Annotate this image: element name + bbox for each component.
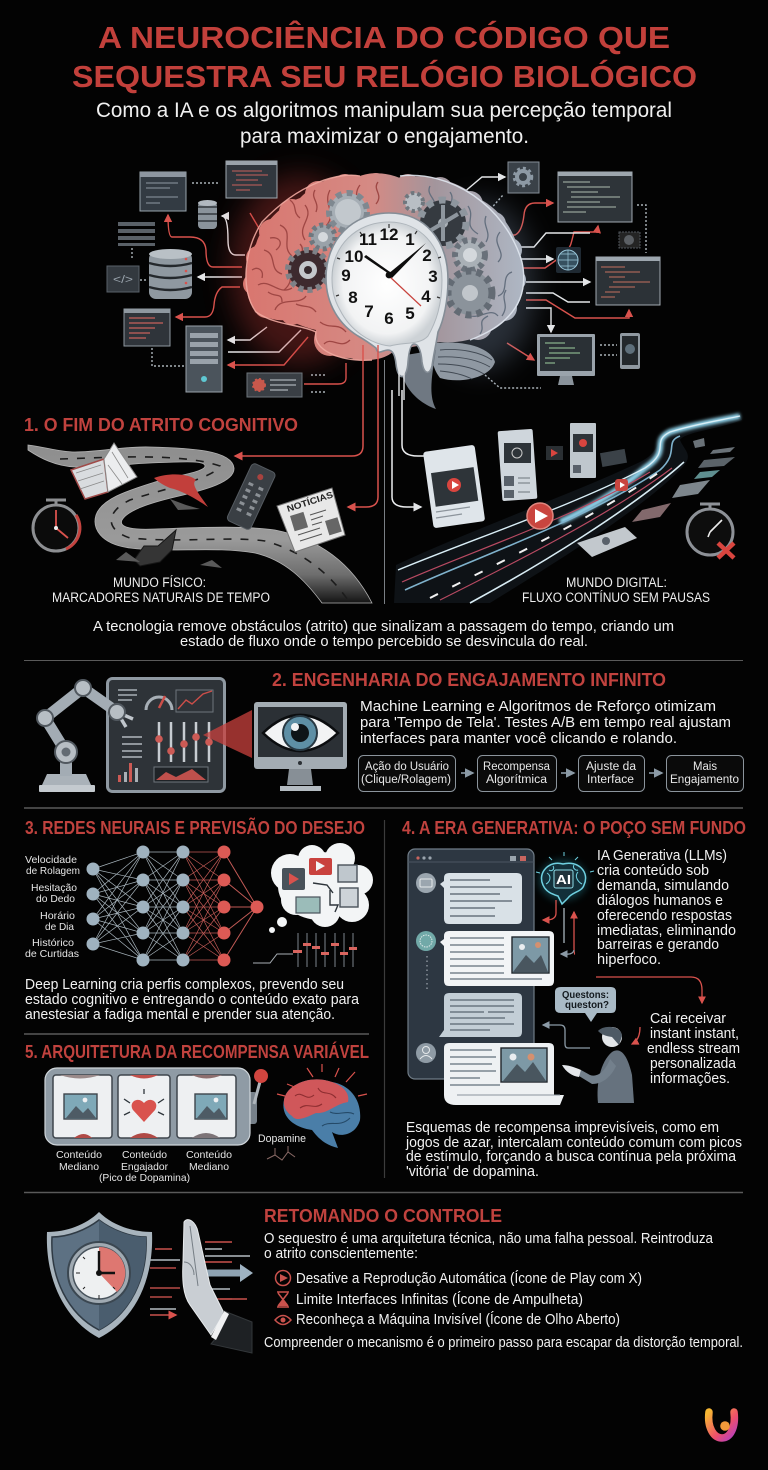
winding road: physical world	[28, 443, 372, 603]
stop hand	[183, 1220, 252, 1353]
section: taking back control	[47, 1206, 743, 1353]
tip: limit infinite interfaces: Limite Interfaces Infinitas (Ícone de Ampulheta)	[296, 1291, 583, 1308]
highway: digital world	[394, 414, 742, 603]
body text: estado de fluxo onde o tempo percebido se desvincula do real.	[180, 633, 588, 650]
remote control	[226, 463, 276, 531]
flow: engagement loop	[358, 756, 744, 792]
dark small card	[619, 232, 640, 248]
AI brain icon: AI	[556, 872, 571, 887]
clock numbers: 4	[421, 287, 431, 306]
captions	[52, 575, 710, 605]
vertical stem lines	[363, 345, 404, 400]
reel captions: (Pico de Dopamina)	[99, 1172, 190, 1184]
gears	[288, 193, 492, 315]
body text: variable reward: 'vitória' de dopamina.	[406, 1163, 539, 1180]
body text: stream: endless stream	[647, 1040, 740, 1057]
heading: 3. REDES NEURAIS E PREVISÃO DO DESEJO	[25, 817, 365, 838]
newspaper: NOTÍCIAS	[286, 490, 334, 514]
message bubble 1	[440, 873, 522, 924]
step: adjustment: Interface	[587, 774, 634, 786]
subtitle	[96, 99, 672, 148]
melting clock	[326, 213, 448, 377]
body text: generative AI	[597, 847, 736, 968]
subtitle: para maximizar o engajamento.	[240, 125, 529, 148]
clock numbers	[341, 225, 438, 328]
neural network diagram	[86, 846, 264, 966]
input labels	[25, 854, 80, 960]
body text: generative AI: IA Generativa (LLMs)	[597, 847, 727, 864]
chat window	[408, 849, 564, 1105]
intro text: o atrito conscientemente:	[264, 1245, 418, 1262]
shield	[47, 1212, 152, 1338]
input labels: do Dedo	[36, 893, 75, 905]
step: more engagement: Engajamento	[670, 774, 739, 786]
step: user action: Ação do Usuário	[365, 761, 449, 773]
slot machine	[45, 1068, 268, 1145]
title	[72, 19, 697, 94]
reel captions: Conteúdo	[122, 1149, 167, 1161]
arrow	[561, 772, 574, 774]
data icons, left	[107, 161, 302, 397]
book	[71, 443, 137, 499]
person	[562, 1027, 634, 1103]
gear card	[247, 373, 302, 397]
control panel	[108, 678, 224, 792]
brain folds	[252, 182, 379, 344]
section 2: infinite engagement engineering	[37, 670, 744, 792]
step: more engagement: Mais	[693, 761, 717, 773]
body text: generative AI: hiperfoco.	[597, 951, 661, 968]
body text	[93, 618, 674, 650]
clock numbers: 7	[364, 302, 374, 321]
monitor	[537, 334, 595, 385]
arrow	[649, 772, 662, 774]
window: code	[596, 257, 660, 305]
robot arm	[37, 680, 133, 792]
avatars	[416, 873, 436, 1063]
clock numbers: 11	[359, 230, 377, 249]
reel captions: Mediano	[59, 1161, 99, 1173]
clock ticks	[336, 224, 441, 298]
captions: MUNDO DIGITAL:	[566, 575, 667, 590]
window: top left	[140, 172, 186, 211]
section 3: neural networks	[25, 817, 373, 1023]
stopwatch	[33, 500, 80, 551]
step: more engagement	[666, 756, 744, 792]
speech bubble: queston?	[565, 1000, 609, 1011]
server tower	[186, 326, 222, 392]
dopamine label: Dopamine	[258, 1133, 306, 1145]
body text	[360, 698, 731, 747]
dopamine rays	[277, 1064, 367, 1096]
section 1: the end of cognitive friction	[24, 360, 742, 650]
intro text: O sequestro é uma arquitetura técnica, não uma falha pessoal. Reintroduza	[264, 1230, 714, 1247]
small brain	[277, 1064, 367, 1148]
code icon: </>	[113, 274, 133, 286]
clock numbers: 6	[384, 309, 394, 328]
arrow	[461, 772, 473, 774]
body text: stream: instant instant,	[650, 1025, 739, 1042]
clock hands	[364, 243, 426, 306]
input labels: Hesitação	[31, 882, 77, 894]
body text	[25, 976, 360, 1023]
cerebellum and brain stem	[433, 342, 495, 380]
newspaper	[277, 488, 345, 552]
message bubble 2	[440, 931, 554, 986]
body text: variable reward: Esquemas de recompensa imprevisíveis, como em	[406, 1119, 719, 1136]
step: user action	[358, 756, 456, 792]
reel captions: Conteúdo	[56, 1149, 102, 1161]
step: user action: (Clique/Rolagem)	[361, 774, 451, 786]
big database	[149, 249, 192, 299]
captions: MUNDO FÍSICO:	[113, 575, 206, 590]
input labels: de Curtidas	[25, 948, 79, 960]
captions: FLUXO CONTÍNUO SEM PAUSAS	[522, 590, 710, 605]
heading: 1. O FIM DO ATRITO COGNITIVO	[24, 415, 298, 435]
step: adjustment	[578, 756, 644, 792]
cloud icons	[282, 868, 305, 890]
hero illustration: brain with melting clock	[107, 161, 660, 409]
tip: disable autoplay: Desative a Reprodução Automática (Ícone de Play com X)	[296, 1270, 642, 1287]
phone	[620, 333, 640, 369]
floating thumbnails	[577, 438, 735, 557]
rubble	[134, 530, 176, 566]
body text: para 'Tempo de Tela'. Testes A/B em tempo real ajustam	[360, 714, 731, 731]
clock numbers: 8	[348, 288, 358, 307]
step: reward: Algorítmica	[486, 774, 548, 786]
tip: recognize the invisible machine: Reconheça a Máquina Invisível (Ícone de Olho Aberto)	[296, 1311, 620, 1328]
captions: MARCADORES NATURAIS DE TEMPO	[52, 590, 270, 605]
reel captions: Conteúdo	[186, 1149, 232, 1161]
body text: interfaces para manter você clicando e rolando.	[360, 730, 677, 747]
list rows	[118, 222, 155, 246]
step: adjustment: Ajuste da	[586, 761, 637, 773]
AI brain icon	[536, 852, 594, 904]
speed lines and arrows	[150, 1242, 253, 1315]
body text: variable reward: jogos de azar, intercalam conteúdo comum com picos	[405, 1134, 742, 1151]
clock numbers: 12	[380, 225, 398, 244]
window: red code	[124, 309, 170, 346]
body text: generative AI: imediatas, eliminando	[597, 922, 736, 939]
body text: stream: Cai receivar	[650, 1010, 726, 1027]
body text: generative AI: oferecendo respostas	[597, 907, 732, 924]
body text: generative AI: barreiras e gerando	[597, 936, 719, 953]
title: SEQUESTRA SEU RELÓGIO BIOLÓGICO	[72, 58, 697, 94]
body text: Machine Learning e Algoritmos de Reforço otimizam	[360, 698, 716, 715]
body text: variable reward	[405, 1119, 742, 1180]
output sliders	[253, 933, 357, 967]
body text: stream: informações.	[650, 1070, 730, 1087]
reel images	[60, 1075, 227, 1138]
body text: Deep Learning cria perfis complexos, prevendo seu	[25, 976, 344, 993]
thought cloud	[269, 843, 373, 933]
subtitle: Como a IA e os algoritmos manipulam sua percepção temporal	[96, 99, 672, 122]
window: code	[558, 172, 632, 222]
lever	[243, 1069, 268, 1124]
window: code	[226, 161, 277, 198]
data icons, right	[508, 162, 660, 385]
input labels: Velocidade	[25, 854, 77, 866]
speech bubble: Questons:	[562, 990, 609, 1001]
circuit connector lines	[132, 177, 646, 392]
video windows	[423, 423, 627, 528]
message bubble 4	[444, 1043, 564, 1105]
clock numbers: 3	[428, 267, 438, 286]
dopamine label	[258, 1133, 306, 1160]
body text: estado cognitivo e entregando o conteúdo exato para	[25, 991, 360, 1008]
heading: RETOMANDO O CONTROLE	[264, 1206, 502, 1226]
red tear	[154, 474, 208, 507]
body text: variable reward: de estímulo, forçando a busca contínua pela próxima	[406, 1148, 737, 1165]
speech bubble	[555, 987, 616, 1022]
AI arrows	[543, 900, 702, 1048]
step: reward: Recompensa	[483, 761, 551, 773]
clock numbers: 2	[422, 246, 432, 265]
reel captions: Engajador	[121, 1161, 168, 1173]
body text: generative AI: demanda, simulando	[597, 877, 729, 894]
heading: 2. ENGENHARIA DO ENGAJAMENTO INFINITO	[272, 670, 666, 690]
message bubble 3	[439, 993, 522, 1037]
code icon	[107, 266, 139, 292]
body text: stream: personalizada	[650, 1055, 737, 1072]
clock numbers: 10	[345, 247, 363, 266]
body text: A tecnologia remove obstáculos (atrito) que sinalizam a passagem do tempo, criando um	[93, 618, 674, 635]
globe	[556, 247, 581, 273]
divider between worlds	[384, 360, 386, 604]
body text: generative AI: diálogos humanos e	[597, 892, 723, 909]
title: A NEUROCIÊNCIA DO CÓDIGO QUE	[98, 19, 670, 55]
monitor with eye	[254, 702, 347, 791]
brain	[243, 173, 526, 409]
brain glow	[230, 175, 370, 365]
section 5: variable reward architecture	[25, 1041, 369, 1184]
heading: 5. ARQUITETURA DA RECOMPENSA VARIÁVEL	[25, 1041, 369, 1062]
red light cone	[203, 710, 252, 758]
step: reward	[478, 756, 556, 792]
small database	[198, 200, 217, 229]
input labels: Histórico	[32, 937, 74, 949]
stopwatch with X	[687, 504, 734, 558]
reel captions: Mediano	[189, 1161, 229, 1173]
input labels: de Rolagem	[26, 865, 80, 877]
reels	[53, 1075, 236, 1138]
section 4: the generative era	[402, 818, 746, 1180]
body text: generative AI: cria conteúdo sob	[597, 862, 709, 879]
input labels: de Dia	[45, 921, 74, 933]
shield clock	[68, 1242, 130, 1304]
intro text	[264, 1230, 714, 1262]
play buttons	[527, 479, 628, 529]
body text: stream	[647, 1010, 740, 1087]
gear card	[508, 162, 539, 193]
clock numbers: 5	[405, 304, 415, 323]
clock numbers: 1	[405, 230, 415, 249]
logo	[709, 1412, 734, 1438]
input labels: Horário	[40, 910, 75, 922]
body text: anestesiar a fadiga mental e prender sua atenção.	[25, 1006, 335, 1023]
arrows to the physical and digital worlds	[235, 390, 428, 507]
clock numbers: 9	[341, 266, 351, 285]
reel captions	[56, 1149, 232, 1184]
